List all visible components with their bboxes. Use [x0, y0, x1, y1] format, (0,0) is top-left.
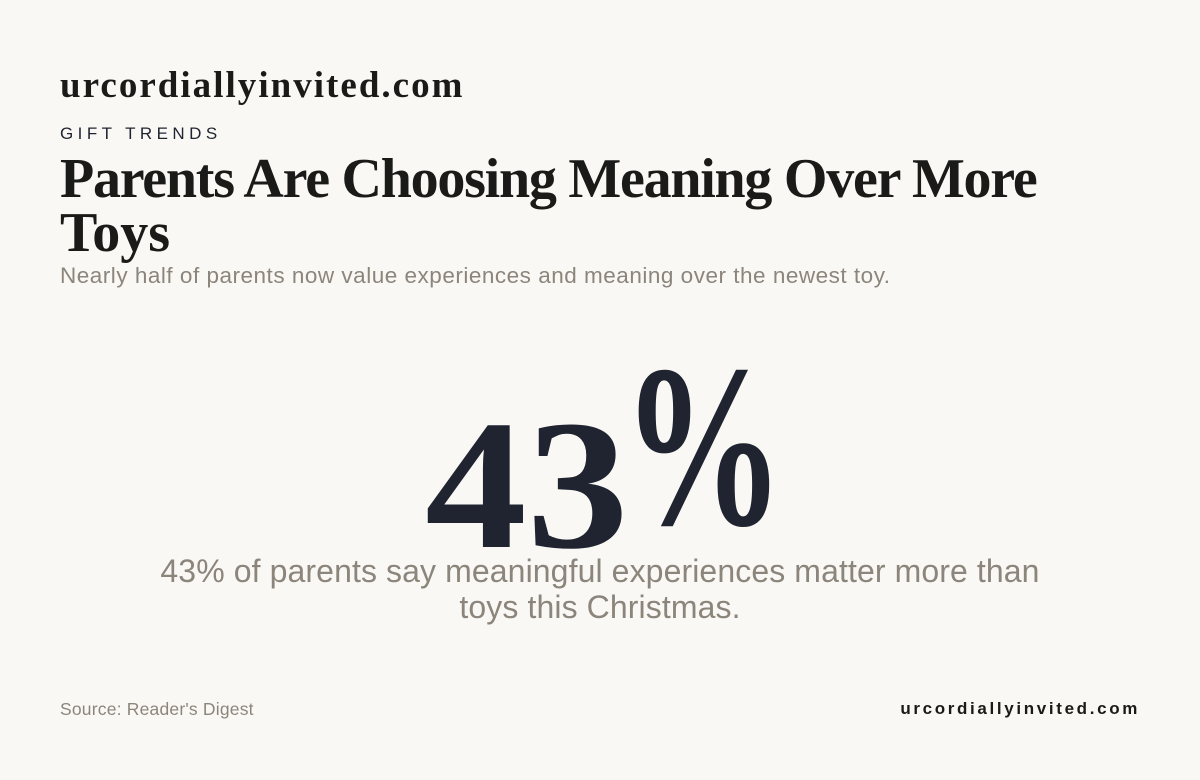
- eyebrow label: GIFT TRENDS: [60, 124, 222, 143]
- statistic caption: 43% of parents say meaningful experiences matter more than toys this Christmas.: [160, 553, 1040, 625]
- big statistic: 43: [425, 383, 628, 588]
- footer brand: urcordiallyinvited.com: [900, 699, 1140, 718]
- title: Parents Are Choosing Meaning Over More: [60, 148, 1036, 210]
- big statistic: [425, 318, 784, 588]
- subtitle: Nearly half of parents now value experiences and meaning over the newest toy.: [60, 263, 891, 288]
- title: [60, 148, 1036, 264]
- title: Toys: [60, 202, 170, 264]
- brand wordmark: urcordiallyinvited.com: [60, 65, 464, 106]
- big statistic: %: [622, 318, 784, 575]
- source note: Source: Reader's Digest: [60, 699, 254, 719]
